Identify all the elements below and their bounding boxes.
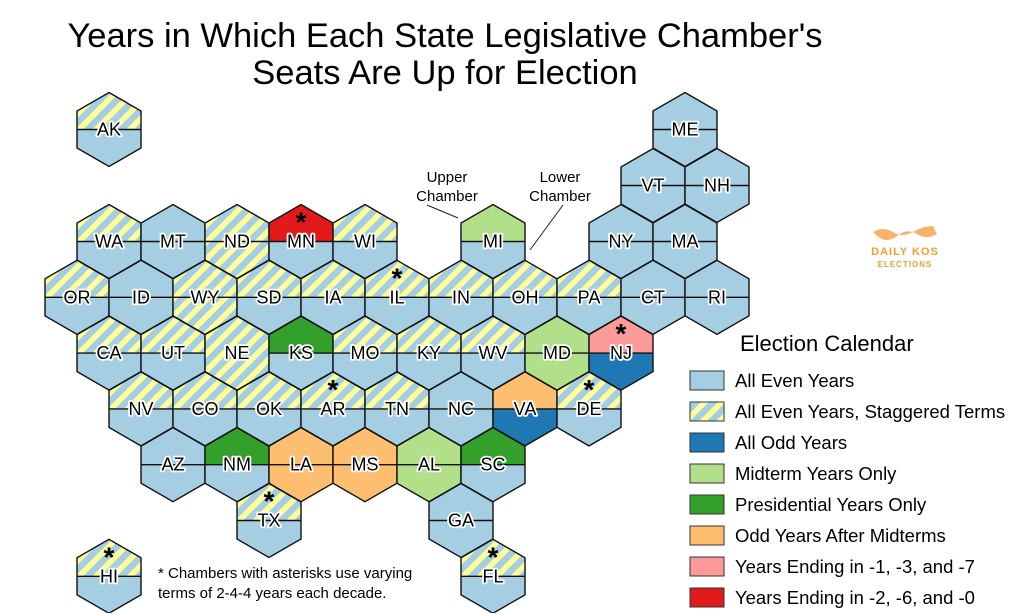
MI: MI: [483, 232, 503, 252]
NJ: NJ: [610, 343, 632, 363]
IA: [301, 260, 365, 334]
legend items: Years Ending in -1, -3, and -7: [735, 556, 975, 577]
ME: [653, 92, 717, 166]
OR: OR: [64, 287, 91, 307]
NH: [685, 148, 749, 222]
AR: *: [328, 374, 339, 405]
MS: MS: [352, 455, 378, 475]
WI: WI: [354, 232, 376, 252]
KS: [269, 316, 333, 390]
AR: AR: [320, 399, 346, 419]
WA: WA: [95, 232, 123, 252]
MD: MD: [543, 343, 571, 363]
annotation: lower chamber: [529, 169, 591, 250]
LA: LA: [290, 455, 312, 475]
NJ: *: [616, 318, 627, 349]
annotation: upper chamber: Chamber: [416, 188, 478, 205]
NJ: [589, 316, 653, 390]
IL: IL: [389, 287, 405, 307]
NC: [429, 372, 493, 446]
HI: HI: [100, 566, 118, 586]
SD: SD: [256, 287, 282, 307]
OH: OH: [512, 287, 538, 307]
UT: [141, 316, 205, 390]
NM: NM: [223, 455, 251, 475]
ND: ND: [224, 232, 250, 252]
SD: [237, 260, 301, 334]
legend items: Presidential Years Only: [735, 494, 927, 515]
MS: [333, 428, 397, 502]
GA: GA: [448, 510, 474, 530]
legend items: All Even Years: [735, 370, 854, 391]
HI: [77, 539, 141, 613]
NM: [205, 428, 269, 502]
title: Seats Are Up for Election: [252, 54, 638, 92]
KS: KS: [289, 343, 313, 363]
MI: [461, 204, 525, 278]
FL: FL: [482, 566, 504, 586]
annotation: upper chamber: Upper: [427, 169, 467, 186]
AR: [301, 372, 365, 446]
UT: UT: [161, 343, 185, 363]
legend items: Odd Years After Midterms: [735, 525, 946, 546]
NH: NH: [704, 176, 730, 196]
IN: [429, 260, 493, 334]
CT: CT: [641, 287, 665, 307]
MN: MN: [287, 232, 315, 252]
MD: [525, 316, 589, 390]
WY: WY: [190, 287, 220, 307]
MN: [269, 204, 333, 278]
legend items: Years Ending in -2, -6, and -0: [735, 587, 975, 608]
legend items: Midterm Years Only: [735, 463, 897, 484]
VA: VA: [514, 399, 536, 419]
OR: [45, 260, 109, 334]
NE: NE: [224, 343, 250, 363]
WI: [333, 204, 397, 278]
AL: [397, 428, 461, 502]
footnote: terms of 2-4-4 years each decade.: [158, 585, 386, 602]
FL: *: [488, 541, 499, 572]
SC: [461, 428, 525, 502]
CT: [621, 260, 685, 334]
OK: OK: [256, 399, 282, 419]
AZ: [141, 428, 205, 502]
legend items: All Odd Years: [735, 432, 847, 453]
MO: [333, 316, 397, 390]
WA: [77, 204, 141, 278]
logo: Daily Kos Elections: ELECTIONS: [878, 260, 932, 269]
PA: PA: [578, 287, 600, 307]
annotation: upper chamber: [416, 169, 478, 218]
FL: [461, 539, 525, 613]
CO: CO: [192, 399, 218, 419]
ND: [205, 204, 269, 278]
MN: *: [296, 206, 307, 238]
title: [67, 17, 823, 92]
DE: [557, 372, 621, 446]
WY: [173, 260, 237, 334]
HI: *: [104, 541, 115, 572]
OH: [493, 260, 557, 334]
NV: [109, 372, 173, 446]
footnote: [158, 565, 412, 602]
KY: KY: [417, 343, 441, 363]
NY: [589, 204, 653, 278]
MT: MT: [160, 232, 186, 252]
MT: [141, 204, 205, 278]
NY: NY: [608, 232, 634, 252]
MA: MA: [672, 232, 698, 252]
IL: *: [392, 262, 403, 293]
ID: ID: [132, 287, 150, 307]
ID: [109, 260, 173, 334]
WV: WV: [478, 343, 508, 363]
DE: DE: [576, 399, 602, 419]
logo: Daily Kos Elections: DAILY KOS: [871, 246, 939, 258]
footnote: * Chambers with asterisks use varying: [158, 565, 412, 582]
VT: VT: [641, 176, 665, 196]
legend title: Election Calendar: [740, 331, 914, 356]
GA: [429, 484, 493, 558]
annotation: lower chamber: Chamber: [529, 188, 591, 205]
legend items: All Even Years, Staggered Terms: [735, 401, 1005, 422]
legend: [690, 331, 1005, 608]
TX: *: [264, 486, 275, 516]
IN: IN: [452, 287, 470, 307]
annotation: lower chamber: Lower: [540, 169, 580, 186]
LA: [269, 428, 333, 502]
PA: [557, 260, 621, 334]
CA: [77, 316, 141, 390]
IA: IA: [324, 287, 342, 307]
AZ: AZ: [161, 455, 185, 475]
MA: [653, 204, 717, 278]
TN: TN: [385, 399, 409, 419]
title: Years in Which Each State Legislative Chamber's: [67, 17, 823, 55]
RI: RI: [708, 287, 726, 307]
legend items: [690, 370, 1005, 608]
NC: NC: [448, 399, 474, 419]
OK: [237, 372, 301, 446]
TX: [237, 484, 301, 558]
NV: NV: [128, 399, 154, 419]
DE: *: [584, 374, 595, 405]
AL: AL: [418, 455, 440, 475]
ME: ME: [672, 120, 698, 140]
hex map: [45, 92, 749, 613]
IL: [365, 260, 429, 334]
AK: AK: [97, 120, 121, 140]
WV: [461, 316, 525, 390]
logo: Daily Kos Elections: [871, 226, 939, 269]
VT: [621, 148, 685, 222]
CA: CA: [96, 343, 122, 363]
AK: [77, 92, 141, 166]
NE: [205, 316, 269, 390]
SC: SC: [480, 455, 506, 475]
TX: TX: [257, 510, 281, 530]
RI: [685, 260, 749, 334]
VA: [493, 372, 557, 446]
TN: [365, 372, 429, 446]
KY: [397, 316, 461, 390]
MO: MO: [350, 343, 380, 363]
CO: [173, 372, 237, 446]
